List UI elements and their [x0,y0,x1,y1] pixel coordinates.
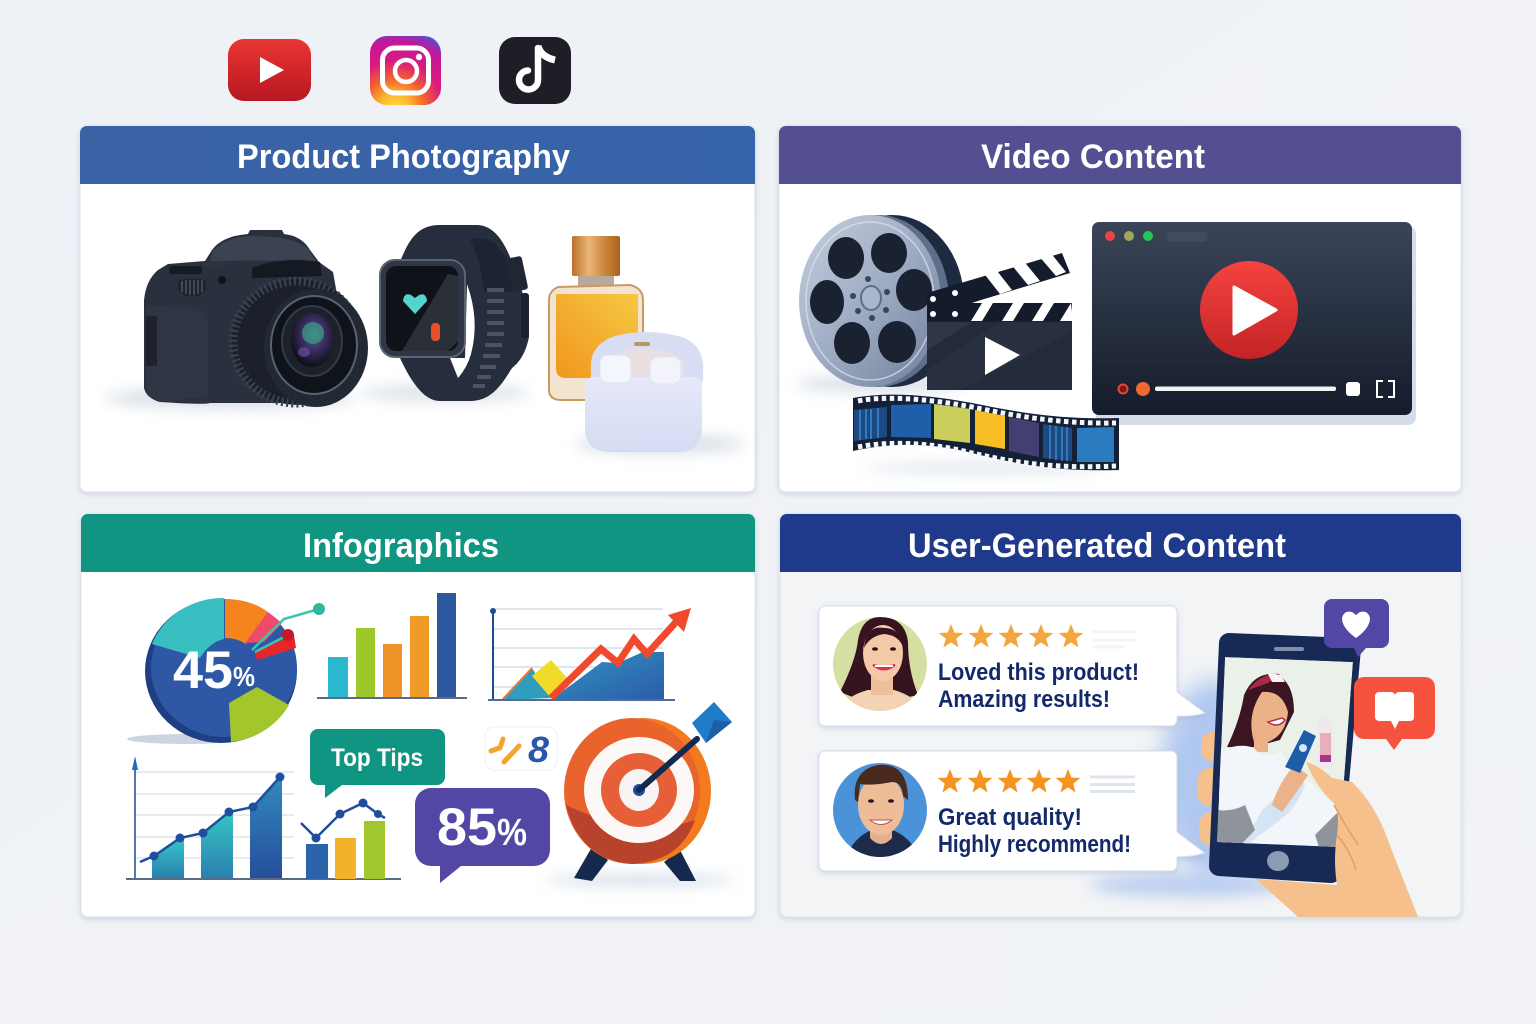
hand and thumb [1256,762,1418,917]
icon: film strip [853,395,1119,474]
rating stars [939,624,1083,648]
icon: camera [105,230,368,409]
review card 2 [819,751,1205,871]
rating stars [938,769,1080,792]
panel: Product Photography [80,126,755,492]
icon: video player window [1092,222,1416,425]
review text: Highly recommend! [938,831,1131,858]
blue glow behind phone [1090,680,1290,897]
panel card [779,126,1461,492]
pie chart 45% [127,598,325,744]
avatar: woman [833,617,927,711]
small combo chart [301,798,385,879]
social icons row [228,36,571,105]
icon: Instagram [370,36,441,105]
heading: Product Photography [237,138,570,176]
speech bubble [819,606,1205,726]
panel: User-Generated Content [780,514,1461,917]
bar chart [317,593,467,699]
review text: Loved this product! [938,659,1139,686]
icon: smartwatch [360,225,530,402]
phone [1219,643,1351,873]
review text: Amazing results! [938,686,1110,713]
review text: Great quality! [938,804,1082,831]
icon: heart bubble [1324,599,1389,657]
growth chart with line [126,756,401,880]
review text [938,804,1131,858]
panel card [780,514,1461,917]
callout: Top Tips [310,729,445,798]
avatar: man [833,763,927,857]
fingers behind phone [1197,732,1215,846]
panel: Infographics [81,514,755,917]
pie chart 45%: 45 [173,641,233,700]
icon: comment bubble [1354,677,1435,750]
speech bubble [819,751,1205,871]
panel header [780,514,1461,572]
panel card [81,514,755,917]
panel: Video Content [779,126,1461,492]
area chart with rising arrow [488,608,691,701]
icon: film reel [795,215,965,393]
badge: check and 8 [485,727,557,770]
callout: 85% [415,788,550,883]
panel card [80,126,755,492]
phone screen [1217,657,1353,860]
panel header [779,126,1461,184]
icon: perfume bottle [549,236,643,400]
pie chart 45%: % [233,661,255,692]
infographic canvas [78,36,1464,922]
icon: clapperboard [927,252,1072,390]
callout: 85%: 85 [437,798,497,857]
icon: earbuds case [575,332,745,454]
panel header [81,514,755,572]
callout: 85%: % [497,812,527,854]
heading: Video Content [981,138,1205,176]
review card 1 [819,606,1205,726]
home button [1267,851,1289,871]
heading: User-Generated Content [908,527,1286,565]
callout: Top Tips: Top Tips [331,744,423,772]
speaker [1274,647,1304,651]
icon: TikTok [499,37,571,104]
badge: check and 8: 8 [528,729,549,770]
icon: YouTube [228,39,311,101]
heading: Infographics [303,527,499,565]
panel header [80,126,755,184]
phone and hand illustration [1197,643,1418,917]
icon: target with arrow [544,702,736,886]
review text [938,659,1139,713]
